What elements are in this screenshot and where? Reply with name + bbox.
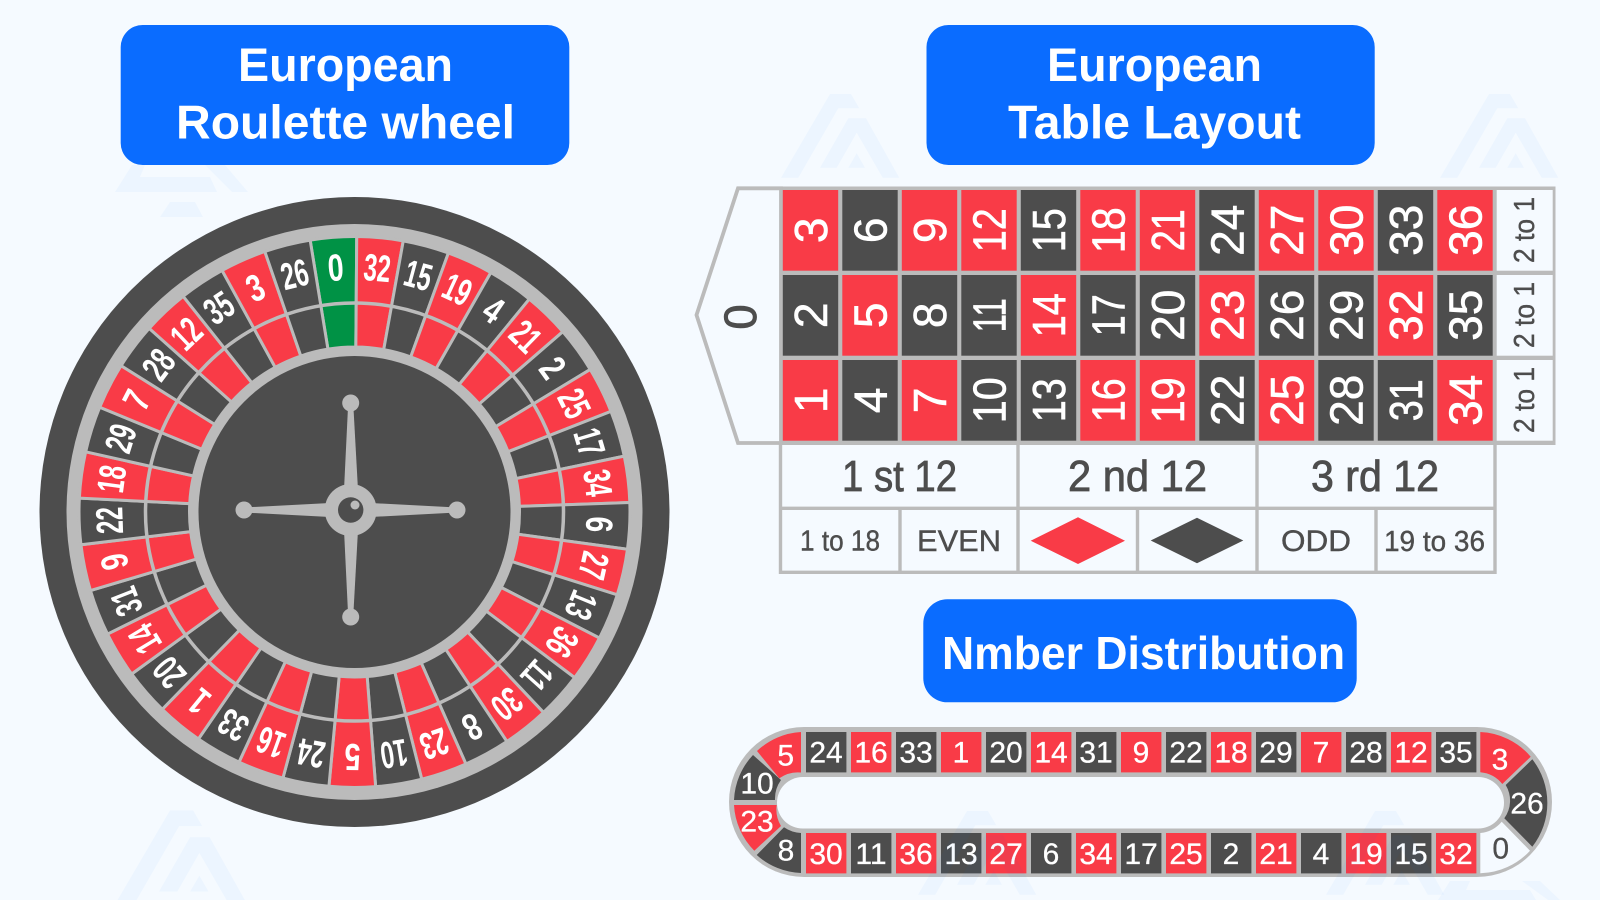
wheel pockets and numbers: 13 [556, 585, 606, 626]
bottom row cells: 13 [944, 838, 978, 871]
wheel pockets and numbers: 23 [414, 719, 454, 768]
number cells: 4 [844, 388, 896, 413]
wheel pockets and numbers: 2 [530, 350, 573, 387]
number cells: 11 [964, 298, 1016, 332]
heading: European Roulette wheel [121, 25, 569, 165]
even money bets row: EVEN [917, 525, 1001, 558]
panel: number distribution track [729, 727, 1552, 877]
heading: European Roulette wheel: Roulette wheel [176, 96, 515, 148]
wheel pockets and numbers: 24 [294, 730, 328, 777]
number cells: 33 [1380, 205, 1432, 256]
bottom row cells: 30 [809, 838, 843, 871]
number cells: 28 [1320, 375, 1372, 426]
number cells: 24 [1202, 205, 1254, 256]
bottom row cells: 36 [899, 838, 933, 871]
bottom row cells: 15 [1394, 838, 1428, 871]
number cells: 9 [904, 218, 956, 243]
left curve segments [734, 732, 801, 873]
wheel pockets and numbers: 20 [144, 648, 194, 697]
left curve segments: 5 [777, 740, 794, 772]
wheel pockets and numbers: 6 [577, 515, 619, 533]
top row cells: 31 [1079, 737, 1113, 770]
top row cells: 33 [899, 737, 933, 770]
wheel pockets and numbers: 14 [119, 616, 170, 661]
number cells: 10 [964, 377, 1016, 423]
number cells: 32 [1380, 290, 1432, 341]
right curve segments [1480, 732, 1547, 873]
top row cells: 29 [1259, 737, 1293, 770]
bottom row cells: 4 [1313, 838, 1329, 871]
heading: European Table Layout: European [1047, 38, 1262, 91]
number cells: 7 [904, 388, 956, 413]
heading: European Table Layout: Table Layout [1008, 96, 1301, 148]
panel: roulette wheel [40, 197, 670, 827]
wheel centre disc [188, 346, 520, 678]
number cells: 23 [1202, 290, 1254, 341]
top row cells: 20 [989, 737, 1023, 770]
number cells: 18 [1082, 207, 1134, 253]
top row cells: 35 [1439, 737, 1473, 770]
top row cells: 12 [1394, 737, 1428, 770]
icon: red diamond [1031, 517, 1125, 564]
number cells: 8 [904, 303, 956, 328]
right curve segments: 0 [1492, 832, 1509, 866]
wheel pockets and numbers: 15 [400, 251, 437, 300]
top row cells: 24 [809, 737, 843, 770]
bottom row cells: 2 [1223, 838, 1239, 871]
wheel pockets and numbers: 33 [211, 700, 256, 750]
number cells: 30 [1320, 205, 1372, 256]
top row cells: 1 [953, 737, 969, 770]
track outline [729, 727, 1552, 877]
wheel pockets and numbers: 0 [326, 247, 345, 290]
wheel pockets and numbers [77, 234, 633, 790]
wheel pockets and numbers: 5 [344, 735, 361, 777]
zero pocket [696, 188, 781, 443]
wheel pockets and numbers: 34 [575, 467, 621, 499]
number cells: 22 [1202, 375, 1254, 426]
column bets: 2 to 1: 2 to 1 [1509, 367, 1541, 433]
top row cells: 28 [1349, 737, 1383, 770]
wheel pockets and numbers: 19 [436, 264, 479, 315]
wheel pockets and numbers: 4 [474, 289, 511, 333]
wheel pockets and numbers: 32 [362, 245, 393, 291]
even money bets row: ODD [1281, 525, 1351, 558]
number cells: 5 [844, 303, 896, 328]
top row cells: 7 [1313, 737, 1329, 770]
dozen bets row: 3 rd 12 [1311, 452, 1439, 501]
left curve segments: 10 [740, 768, 774, 800]
number cells: 13 [1023, 378, 1075, 422]
number cells: 6 [844, 218, 896, 243]
bottom row cells: 27 [989, 838, 1023, 871]
bottom row cells: 21 [1259, 838, 1293, 871]
number cells: 31 [1380, 379, 1432, 421]
wheel pockets and numbers: 31 [101, 581, 151, 622]
wheel pockets and numbers: 27 [570, 548, 618, 583]
bottom row cells: 6 [1043, 838, 1059, 871]
bottom row cells [806, 833, 1476, 873]
top row cells: 16 [854, 737, 888, 770]
wheel pockets and numbers: 10 [377, 731, 411, 777]
wheel pockets and numbers: 1 [180, 679, 219, 722]
wheel pockets and numbers: 16 [251, 718, 291, 767]
wheel pockets and numbers: 28 [133, 341, 184, 388]
heading: Nmber Distribution: Nmber Distribution [942, 627, 1345, 679]
bottom row cells: 11 [855, 838, 887, 871]
wheel pockets and numbers: 11 [513, 652, 562, 699]
even money bets row: 19 to 36 [1384, 526, 1485, 558]
number cells: 25 [1261, 375, 1313, 426]
wheel pockets and numbers: 17 [565, 423, 614, 461]
wheel pockets and numbers: 12 [162, 309, 211, 359]
dozen bets row: 1 st 12 [842, 452, 957, 501]
heading: European Roulette wheel: European [238, 38, 453, 91]
wheel pockets and numbers: 8 [455, 704, 489, 748]
number cells: 3 [785, 218, 837, 243]
number cells: 16 [1082, 378, 1134, 422]
dozen bets row: 2 nd 12 [1068, 452, 1207, 501]
bottom row cells: 34 [1079, 838, 1113, 871]
top row cells [806, 732, 1476, 772]
bottom row cells: 25 [1169, 838, 1203, 871]
even money bets row [800, 508, 1485, 572]
left curve segments: 8 [778, 834, 794, 868]
number cells: 26 [1261, 290, 1313, 341]
number cells: 14 [1023, 293, 1075, 337]
wheel pockets and numbers: 35 [196, 282, 242, 333]
dozen bets row [780, 443, 1495, 572]
number cells: 27 [1261, 205, 1313, 256]
number cells: 34 [1440, 375, 1492, 426]
wheel pockets and numbers: 30 [483, 679, 531, 729]
number cells: 19 [1142, 377, 1194, 423]
number cells: 29 [1320, 290, 1372, 341]
wheel pockets and numbers: 36 [537, 619, 588, 665]
icon: spinner hub [236, 394, 466, 626]
number cells: 15 [1023, 208, 1075, 252]
number cells: 36 [1440, 205, 1492, 256]
number cells: 35 [1440, 290, 1492, 341]
wheel pockets and numbers: 7 [115, 384, 160, 417]
number cells: 1 [785, 388, 837, 413]
top row cells: 9 [1133, 737, 1149, 770]
top row cells: 22 [1169, 737, 1203, 770]
left curve segments: 23 [740, 806, 774, 838]
wheel pockets and numbers: 9 [94, 549, 138, 573]
right curve segments: 3 [1492, 744, 1508, 776]
bottom row cells: 19 [1349, 838, 1383, 871]
column bets: 2 to 1: 2 to 1 [1509, 197, 1541, 263]
zero pocket: 0 [715, 304, 766, 330]
wheel rim [40, 197, 670, 827]
number cells: 12 [964, 208, 1016, 252]
wheel pockets and numbers: 21 [501, 312, 550, 361]
number cells: 2 [785, 303, 837, 328]
bottom row cells: 17 [1124, 838, 1158, 871]
heading: Nmber Distribution [923, 599, 1357, 702]
heading: European Table Layout [926, 25, 1375, 165]
number cells [783, 190, 1493, 441]
bottom row cells: 32 [1439, 838, 1473, 871]
wheel pockets and numbers: 3 [240, 267, 272, 311]
wheel pockets and numbers: 22 [88, 506, 131, 535]
number cells: 17 [1082, 294, 1134, 336]
number cells: 21 [1142, 209, 1194, 251]
even money bets row: 1 to 18 [800, 526, 880, 558]
wheel pockets and numbers: 18 [89, 463, 135, 495]
top row cells: 14 [1034, 737, 1068, 770]
table grid background [779, 186, 1556, 445]
column bets: 2 to 1 [1497, 190, 1553, 441]
number cells: 20 [1142, 290, 1194, 341]
right curve segments: 26 [1510, 788, 1544, 820]
wheel pockets and numbers: 29 [96, 419, 145, 458]
panel: table layout [696, 186, 1556, 572]
top row cells: 18 [1214, 737, 1248, 770]
column bets: 2 to 1: 2 to 1 [1509, 282, 1541, 348]
icon: black diamond [1151, 518, 1243, 563]
wheel pockets and numbers: 26 [276, 250, 313, 298]
wheel pockets and numbers: 25 [549, 382, 599, 425]
